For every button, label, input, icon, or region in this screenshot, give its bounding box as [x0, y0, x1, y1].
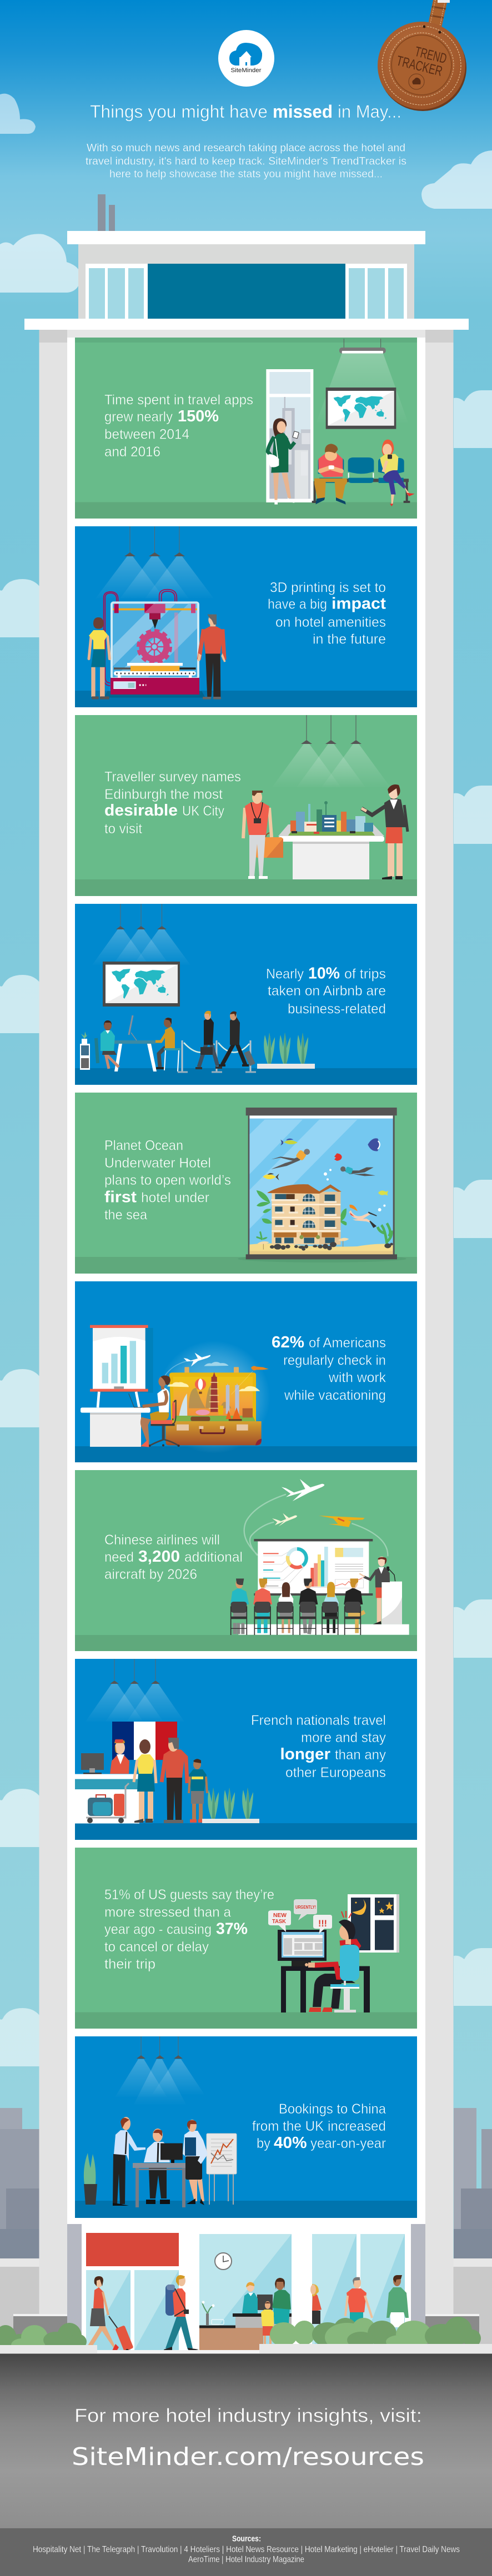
- illustration: airport waiting area: [266, 339, 415, 506]
- figure: woman with phone: [268, 418, 299, 505]
- audience: [230, 1578, 365, 1635]
- clock: [215, 2253, 232, 2270]
- figure: receptionist seated: [106, 1054, 119, 1069]
- text: Airbnb stat: taken on Airbnb are: [268, 983, 386, 999]
- text: travel apps stat: and 2016: [104, 444, 160, 460]
- intro paragraph: [86, 142, 406, 180]
- text: Edinburgh stat: [104, 769, 241, 837]
- bushes: [0, 2317, 481, 2352]
- text: Airbnb stat: business-related: [288, 1002, 386, 1017]
- check-in desk: [75, 1753, 139, 1823]
- presentation screen: [254, 1539, 373, 1596]
- desk and monitor: [133, 2143, 188, 2207]
- text: French stat: than any: [335, 1747, 386, 1763]
- sources list: [33, 2545, 460, 2564]
- bar chart flipchart: [90, 1325, 153, 1407]
- text: travel apps stat: Time spent in travel apps: [104, 392, 253, 407]
- lights: [96, 526, 214, 598]
- tag text: TREND: [413, 44, 448, 67]
- panel 1: travel apps: [75, 338, 417, 519]
- ground floor facade: [0, 2224, 492, 2354]
- text: French stat: longer: [280, 1745, 330, 1763]
- lights: [86, 1659, 184, 1722]
- panel 10: bookings to China: [75, 2036, 417, 2218]
- text: airlines stat: need: [104, 1549, 134, 1565]
- speech bubbles: !!!: [318, 1918, 327, 1929]
- text: underwater hotel stat: Planet Ocean: [104, 1138, 183, 1154]
- text: 3D printing stat: have a big: [268, 596, 327, 612]
- flipchart: [207, 2134, 237, 2205]
- text: French stat: French nationals travel: [251, 1713, 386, 1728]
- gear: [138, 631, 170, 663]
- speech bubbles: NEW: [273, 1912, 287, 1919]
- text: travel apps stat: [104, 392, 253, 460]
- text: 3D printing stat: 3D printing is set to: [270, 580, 386, 595]
- logo wordmark: SiteMinder: [231, 67, 262, 74]
- text: Edinburgh stat: UK City: [182, 803, 224, 819]
- text: China stat: from the UK increased: [252, 2119, 386, 2134]
- icon: cloud house: [229, 43, 262, 66]
- text: airlines stat: aircraft by 2026: [104, 1567, 197, 1582]
- French flag: [112, 1722, 177, 1760]
- hotel tower columns: [24, 319, 469, 2314]
- figure: receptionist: [242, 2282, 258, 2313]
- speech bubbles: TASK: [272, 1918, 286, 1925]
- text: Airbnb stat: [266, 965, 386, 1017]
- text: 3D printing stat: impact: [332, 595, 386, 613]
- text: French stat: more and stay: [301, 1730, 386, 1745]
- figure: tourist man: [243, 791, 283, 879]
- suitcase: [165, 1367, 262, 1445]
- planes: [272, 1479, 365, 1527]
- tag text: [395, 40, 448, 79]
- figure: woman with folder: [183, 2120, 208, 2205]
- low walls: [13, 2314, 479, 2345]
- plants: [257, 1190, 347, 1225]
- figure: child: [189, 1759, 207, 1823]
- text: vacation stat: with work: [328, 1370, 386, 1386]
- panel 9: stressed guests: [75, 1848, 417, 2029]
- panel 8: French travellers: [75, 1659, 417, 1840]
- chair and worker: [140, 1375, 180, 1447]
- stage and podium: [238, 1567, 409, 1635]
- potted plant: [84, 2153, 97, 2205]
- panel 5: underwater hotel: [75, 1093, 417, 1274]
- figure: mother: [134, 1739, 156, 1823]
- sources bar: [0, 2528, 492, 2576]
- text: vacation stat: 62%: [272, 1334, 304, 1351]
- panel 2: 3D printing: [75, 526, 417, 707]
- lights: [92, 904, 190, 965]
- text: vacation stat: while vacationing: [284, 1388, 386, 1403]
- text: Edinburgh stat: Traveller survey names: [104, 769, 241, 785]
- website address: SiteMinder.com/resources: [72, 2443, 424, 2471]
- illustration: aquarium hotel: [238, 1108, 406, 1262]
- figure: walker one: [199, 1043, 218, 1067]
- text: French stat: [251, 1713, 386, 1780]
- text: 3D printing stat: [268, 580, 386, 647]
- luggage cart: [86, 1783, 129, 1823]
- text: 3D printing stat: on hotel amenities: [275, 615, 386, 630]
- illustration: office team: [84, 2117, 237, 2207]
- text: China stat: Bookings to China: [279, 2101, 386, 2117]
- pavement: [0, 2344, 492, 2354]
- night window: [348, 1894, 399, 1953]
- illustration: presentation to audience: [230, 1479, 409, 1635]
- figure: man with phone: [314, 444, 347, 505]
- stanchions: [182, 1040, 250, 1071]
- text: airlines stat: additional: [184, 1549, 243, 1565]
- call to action text: For more hotel industry insights, visit:: [74, 2405, 422, 2426]
- text: China stat: year-on-year: [310, 2136, 386, 2151]
- text: underwater hotel stat: plans to open world’s: [104, 1173, 231, 1188]
- speech bubbles: [268, 1899, 332, 1934]
- illustration: 3D printer: [89, 590, 226, 700]
- title: in May...: [338, 102, 401, 122]
- speech bubbles: URGENTLY!: [295, 1905, 316, 1910]
- panel 6: working on vacation: [75, 1281, 417, 1462]
- text: underwater hotel stat: [104, 1138, 231, 1222]
- figure: guest in green: [272, 2278, 291, 2324]
- planter: [257, 1064, 315, 1069]
- desk: [90, 1415, 141, 1447]
- text: Airbnb stat: 10%: [308, 965, 340, 983]
- figure: man in green: [386, 2275, 409, 2327]
- text: stress stat: their trip: [104, 1956, 155, 1972]
- text: travel apps stat: between 2014: [104, 426, 189, 442]
- footer call to action: [0, 2354, 492, 2528]
- desk: [281, 1966, 370, 2012]
- figure: woman with suitcase: [81, 2276, 134, 2353]
- text: underwater hotel stat: hotel under: [141, 1190, 209, 1206]
- intro paragraph: travel industry, it's hard to keep track. SiteMinder's TrendTracker is: [86, 155, 406, 168]
- text: stress stat: 51% of US guests say they’re: [104, 1887, 274, 1903]
- text: vacation stat: [272, 1334, 386, 1403]
- figure: man in red: [345, 2277, 372, 2326]
- trend tracker leather tag: [378, 0, 466, 111]
- illustration: French flag check-in desk: [75, 1722, 259, 1823]
- figure: client seated: [159, 1048, 171, 1067]
- rocks: [270, 1242, 393, 1251]
- figure: guide woman: [362, 784, 408, 879]
- figure: woman with red hair: [380, 440, 415, 506]
- illustration: suitcase world and worker: [81, 1325, 270, 1453]
- text: airlines stat: [104, 1532, 243, 1582]
- figure: walker two: [222, 1043, 245, 1065]
- divers: [271, 1149, 385, 1227]
- lights: [115, 2036, 204, 2104]
- intro paragraph: With so much news and research taking place across the hotel and: [87, 142, 405, 154]
- text: China stat: 40%: [274, 2134, 307, 2152]
- text: 3D printing stat: in the future: [313, 632, 386, 647]
- panel 3: Edinburgh: [75, 715, 417, 896]
- entrance windows: [86, 2234, 405, 2350]
- planter: [202, 1819, 259, 1823]
- text: travel apps stat: 150%: [178, 407, 219, 425]
- clouds: [0, 94, 492, 2066]
- text: underwater hotel stat: Underwater Hotel: [104, 1155, 211, 1171]
- text: underwater hotel stat: the sea: [104, 1207, 147, 1222]
- red sign: [86, 2233, 179, 2266]
- sources list: AeroTime | Hotel Industry Magazine: [188, 2555, 304, 2564]
- figure: woman viewer: [89, 617, 109, 700]
- text: stress stat: year ago - causing: [104, 1922, 212, 1938]
- figure: backpacker: [164, 2275, 199, 2352]
- text: stress stat: 37%: [216, 1920, 248, 1938]
- text: vacation stat: regularly check in: [283, 1352, 386, 1368]
- figure: standing man: [113, 2117, 145, 2206]
- figure: blonde woman: [310, 2284, 322, 2324]
- text: stress stat: [104, 1887, 274, 1972]
- text: Edinburgh stat: Edinburgh the most: [104, 787, 223, 802]
- illustration: city model table: [243, 784, 408, 879]
- text: vacation stat: of Americans: [309, 1335, 386, 1351]
- text: China stat: [252, 2101, 386, 2152]
- illustration: map screen: [103, 962, 180, 1007]
- lights: [272, 715, 390, 787]
- figure: child: [261, 2301, 274, 2344]
- text: stress stat: to cancel or delay: [104, 1939, 209, 1955]
- monitor: [278, 1930, 327, 1966]
- logo: [218, 30, 274, 87]
- hotel penthouse: [67, 194, 425, 319]
- figure: worker: [305, 1911, 359, 2012]
- text: travel apps stat: grew nearly: [104, 409, 173, 425]
- hotel building: [268, 1184, 342, 1245]
- text: airlines stat: Chinese airlines will: [104, 1532, 220, 1548]
- panel 4: Airbnb business trips: [75, 904, 417, 1085]
- text: Edinburgh stat: desirable: [104, 802, 178, 819]
- figure: receptionist: [110, 1739, 129, 1774]
- figure: man viewer: [197, 615, 226, 700]
- text: French stat: other Europeans: [285, 1765, 386, 1780]
- text: airlines stat: 3,200: [138, 1548, 180, 1566]
- text: underwater hotel stat: first: [104, 1188, 137, 1206]
- text: Airbnb stat: of trips: [344, 966, 386, 982]
- figure: seated man: [144, 2129, 170, 2204]
- title: missed: [273, 102, 333, 122]
- sources heading: Sources:: [232, 2534, 261, 2544]
- panel 7: Chinese airlines: [75, 1470, 417, 1651]
- illustration: stressed worker at night: [268, 1894, 399, 2012]
- title: [90, 102, 401, 122]
- tag text: TRACKER: [395, 53, 444, 79]
- illustration: meeting and queue: [80, 1011, 315, 1072]
- plane, cloud and kite: [165, 1353, 269, 1395]
- figure: father: [162, 1738, 187, 1823]
- sea creatures: [263, 1138, 388, 1195]
- text: Airbnb stat: Nearly: [266, 966, 304, 982]
- text: China stat: by: [257, 2136, 270, 2151]
- text: Edinburgh stat: to visit: [104, 821, 142, 837]
- intro paragraph: here to help showcase the stats you might have missed...: [109, 169, 383, 180]
- text: stress stat: more stressed than a: [104, 1904, 231, 1920]
- title: Things you might have: [90, 102, 268, 122]
- city skyline: [0, 2108, 492, 2347]
- figure: presenter: [359, 1557, 390, 1624]
- reception desk: [199, 2295, 292, 2350]
